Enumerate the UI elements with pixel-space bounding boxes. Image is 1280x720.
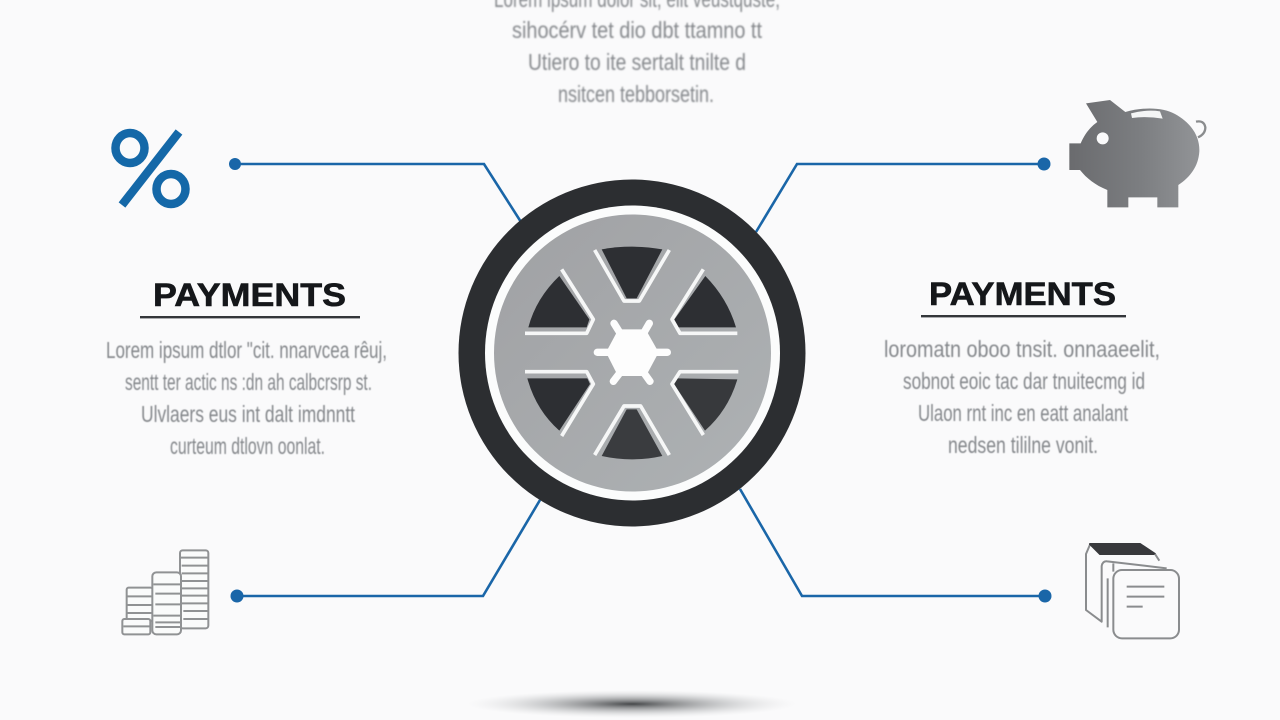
right heading: PAYMENTS [929, 276, 1116, 312]
right heading rule [921, 315, 1126, 317]
white rim ring [485, 206, 780, 500]
middle coin stack [152, 572, 181, 634]
right coin stack [180, 550, 208, 628]
ground shadow [467, 690, 797, 718]
right body text [884, 336, 1160, 458]
central wheel [458, 180, 806, 526]
left heading: PAYMENTS [153, 277, 346, 313]
left coin stack [122, 588, 153, 634]
left body text: Ulvlaers eus int dalt imdnntt [141, 401, 355, 427]
right body text: nedsen tililne vonit. [948, 432, 1098, 458]
connector: top left [229, 158, 521, 222]
right panel: payments [884, 276, 1160, 458]
right body text: sobnot eoic tac dar tnuitecmg id [903, 368, 1145, 394]
left body text: curteum dtlovn oonlat. [170, 433, 325, 459]
icon: percent [116, 132, 186, 205]
top text block: sihocérv tet dio dbt ttamno tt [512, 17, 763, 43]
right body text: loromatn oboo tnsit. onnaaeelit, [884, 336, 1160, 362]
connector: top right [756, 158, 1050, 232]
grey wheel disc [494, 214, 771, 492]
top text block: Utiero to ite sertalt tnilte d [528, 49, 746, 75]
connector: bottom right [740, 489, 1052, 602]
hub [597, 323, 667, 381]
tire [458, 180, 806, 526]
left body text: sentt ter actic ns :dn ah calbcrsrp st. [125, 369, 372, 395]
right body text: Ulaon rnt inc en eatt analant [918, 400, 1128, 426]
left panel: payments [106, 277, 387, 459]
top text block: nsitcen tebborsetin. [558, 81, 714, 107]
top text block [494, 0, 780, 107]
icon: coin stacks [122, 550, 208, 634]
icon: piggy bank [1069, 100, 1205, 207]
left body text: Lorem ipsum dtlor "cit. nnarvcea rêuj, [106, 337, 387, 363]
spoke windows [525, 247, 738, 459]
connector: bottom left [230, 500, 540, 602]
left body text [106, 337, 387, 459]
icon: documents [1086, 544, 1179, 638]
left heading rule [140, 316, 360, 318]
